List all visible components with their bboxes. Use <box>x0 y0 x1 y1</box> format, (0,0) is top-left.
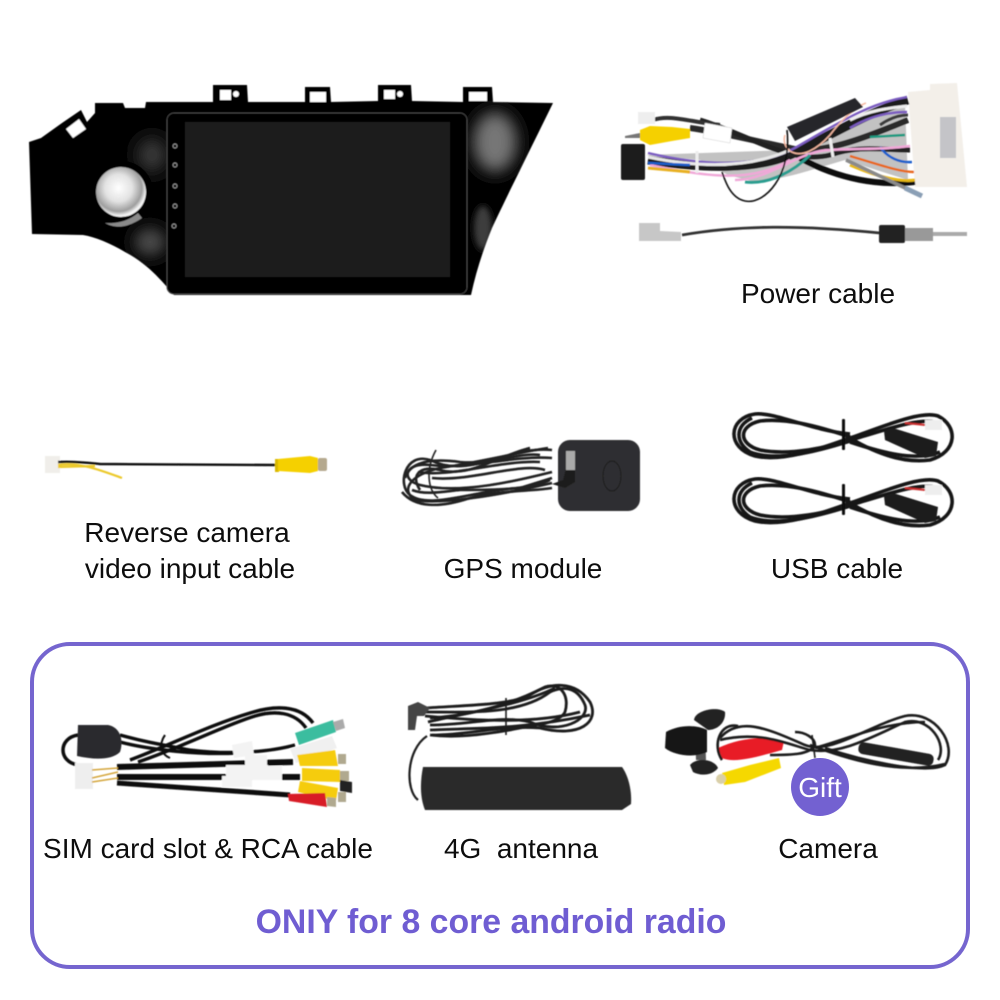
yellow RCA plug <box>640 126 690 145</box>
inline connector <box>858 741 934 767</box>
antenna connector <box>408 702 430 730</box>
radio body <box>29 85 553 295</box>
USB cable 1 <box>734 414 952 461</box>
power cable harness <box>621 83 967 201</box>
screen <box>185 122 450 277</box>
white connector <box>908 83 967 187</box>
4G antenna <box>408 685 631 810</box>
GPS module <box>402 440 640 511</box>
gray shadow web <box>645 105 908 182</box>
caption: GPS: GPS module <box>444 553 602 584</box>
caption: USB: USB cable <box>771 553 903 584</box>
camera head <box>665 726 707 755</box>
SIM slot box <box>77 725 122 759</box>
antenna adapter cable <box>639 223 967 243</box>
caption: reverse camera: video input cable <box>85 553 295 584</box>
caption: SIM: SIM card slot & RCA cable <box>43 833 373 864</box>
GPS SMA <box>552 468 575 488</box>
yellow plug <box>722 758 781 785</box>
rear camera <box>665 709 949 785</box>
antenna bar <box>421 767 631 810</box>
camera mount <box>694 709 725 730</box>
caption: reverse camera <box>84 517 295 584</box>
side buttons <box>172 144 177 228</box>
SIM / RCA cable <box>63 708 352 807</box>
zip ties <box>696 151 698 173</box>
connector <box>75 763 93 789</box>
mounting holes <box>66 90 487 138</box>
caption: reverse camera: Reverse camera <box>84 517 290 548</box>
caption: power cable: Power cable <box>741 278 895 309</box>
radio head unit <box>29 85 553 295</box>
black relay box <box>787 98 863 141</box>
wire bundle <box>648 97 915 201</box>
labels <box>222 741 282 787</box>
gift badge: Gift <box>798 772 842 803</box>
knob <box>91 161 153 223</box>
white tag <box>703 123 732 143</box>
caption: 4G: 4G antenna <box>444 833 598 864</box>
plug white tip <box>638 112 655 124</box>
wires <box>92 768 118 782</box>
gloss highlights <box>134 112 517 256</box>
purple panel <box>32 644 968 967</box>
reverse camera cable <box>45 456 327 478</box>
camera cables <box>718 715 949 768</box>
USB cable 2 <box>734 479 952 526</box>
GPS puck <box>558 440 640 511</box>
RCA plugs <box>295 720 336 745</box>
gift badge <box>791 758 849 816</box>
red plug <box>718 738 784 760</box>
probe <box>846 160 920 195</box>
panel footer note: ONIY for 8 core android radio <box>256 903 726 941</box>
label <box>940 117 956 158</box>
screen bezel <box>167 113 467 294</box>
black connector <box>621 144 645 180</box>
caption: camera: Camera <box>778 833 878 864</box>
